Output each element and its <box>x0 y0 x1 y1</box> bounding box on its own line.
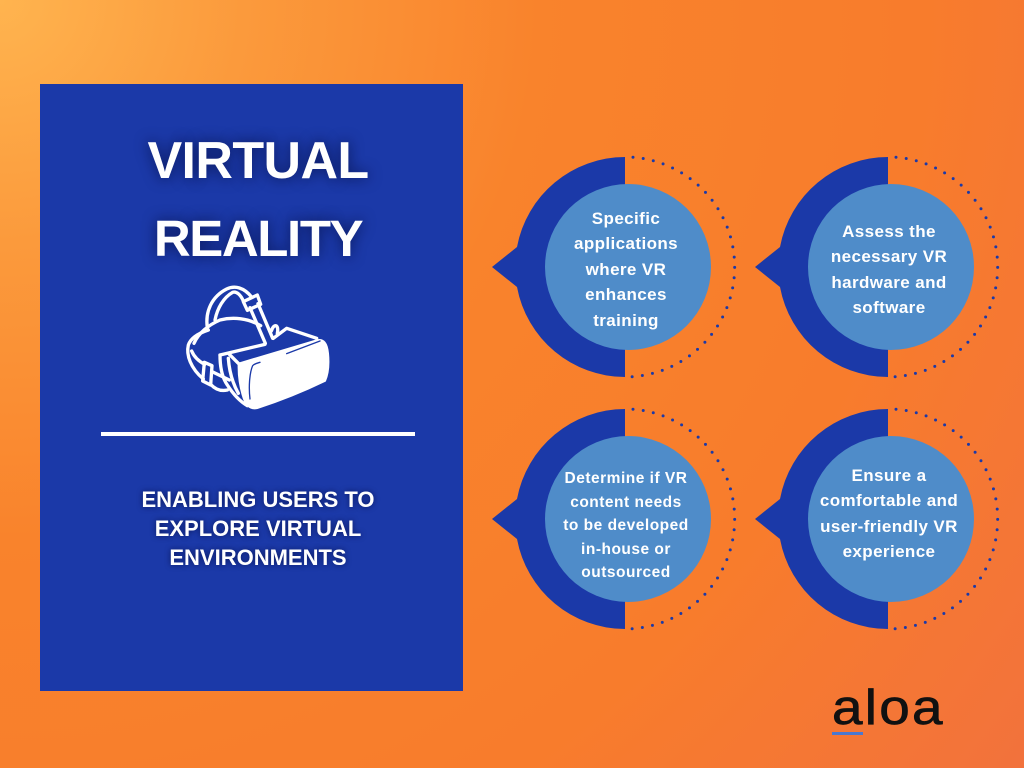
circle: top right <box>755 157 998 377</box>
panel: virtual reality <box>40 84 463 691</box>
text: ensure comfort: Ensure a <box>851 466 926 485</box>
text: assess hardware: necessary VR <box>831 247 947 266</box>
circle: top left <box>492 157 735 377</box>
text: assess hardware: software <box>852 298 926 317</box>
divider <box>101 432 415 436</box>
subtitle: EXPLORE VIRTUAL <box>155 516 361 541</box>
circle: bottom left <box>492 409 735 629</box>
subtitle: ENABLING USERS TO <box>141 487 375 512</box>
text: specific applications: enhances <box>585 285 667 304</box>
text: determine content: outsourced <box>581 564 671 581</box>
subtitle <box>140 487 376 570</box>
text: assess hardware <box>831 222 947 317</box>
logo underline <box>832 732 863 735</box>
text: specific applications: where VR <box>586 260 666 279</box>
icon: VR headset <box>186 286 330 410</box>
text: determine content <box>563 470 689 581</box>
text: ensure comfort: user-friendly VR <box>820 517 958 536</box>
logo: aloa: aloa <box>832 681 945 735</box>
text: specific applications: Specific <box>592 209 660 228</box>
text: specific applications: applications <box>574 234 678 253</box>
text: specific applications: training <box>593 311 659 330</box>
text: ensure comfort: comfortable and <box>820 491 958 510</box>
text: determine content: in-house or <box>581 540 671 558</box>
text: assess hardware: hardware and <box>831 273 947 292</box>
text: ensure comfort: experience <box>843 542 935 561</box>
icon: visor front <box>238 340 329 409</box>
text: specific applications <box>574 209 678 330</box>
title: line two: REALITY <box>154 210 362 267</box>
text: ensure comfort <box>820 466 958 561</box>
text: determine content: Determine if VR <box>565 470 687 487</box>
circle: bottom right <box>755 409 998 629</box>
text: determine content: to be developed <box>563 517 689 534</box>
subtitle: ENVIRONMENTS <box>169 545 347 570</box>
text: determine content: content needs <box>570 494 682 510</box>
title: line one: VIRTUAL <box>147 132 369 190</box>
text: assess hardware: Assess the <box>842 222 936 241</box>
